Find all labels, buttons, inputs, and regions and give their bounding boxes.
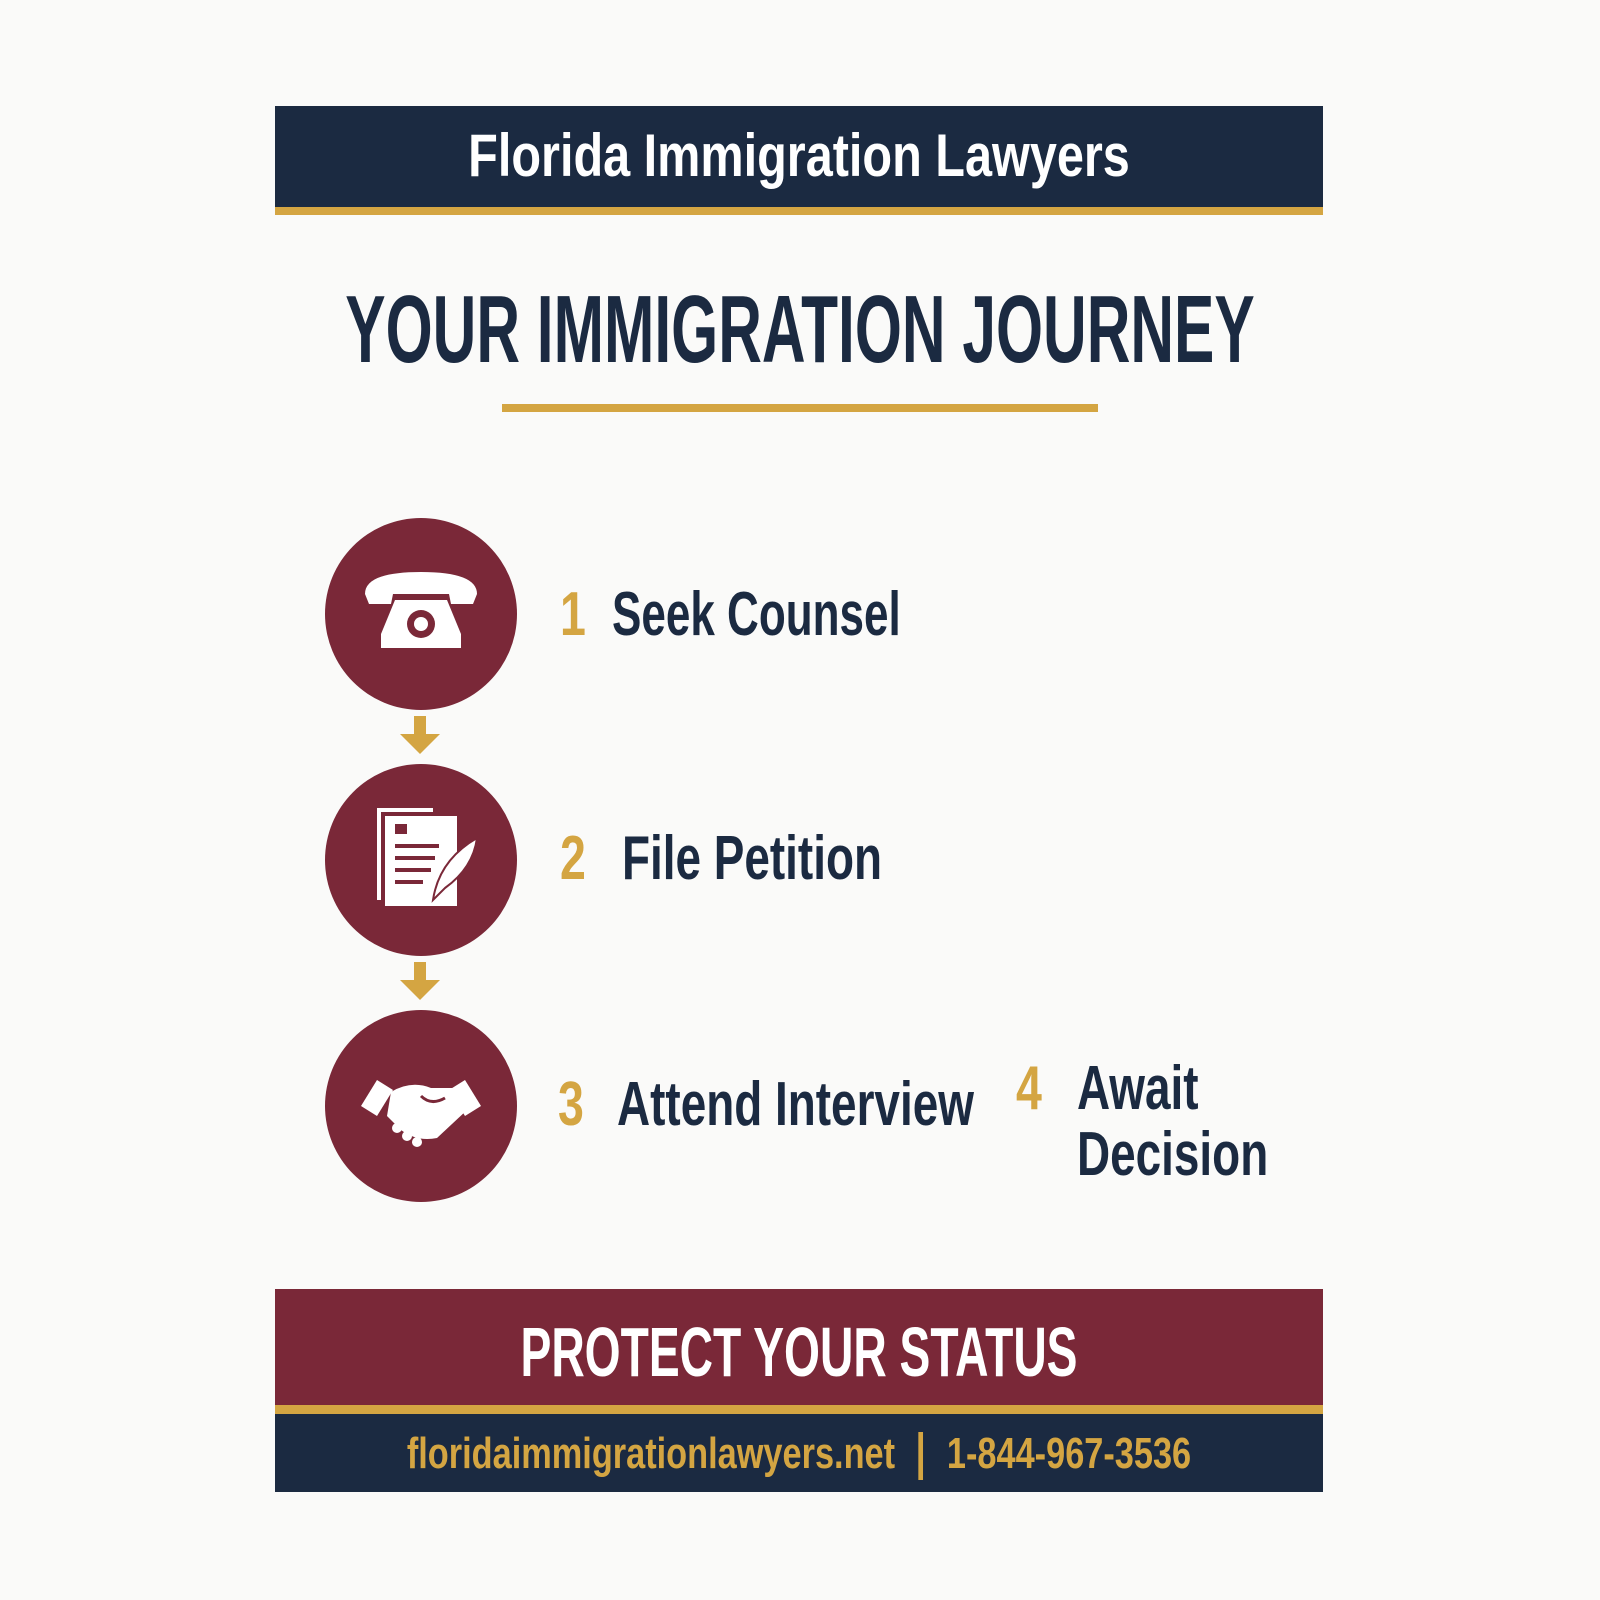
contact footer	[275, 1414, 1323, 1492]
step 3: 3	[558, 1070, 584, 1139]
step 1: Seek Counsel	[612, 580, 901, 649]
icon: handshake	[325, 1010, 517, 1202]
call-to-action banner	[275, 1289, 1323, 1414]
step 2: 2	[560, 824, 586, 893]
arrow 1	[400, 716, 440, 754]
step 4: Await	[1077, 1054, 1199, 1123]
contact text: floridaimmigrationlawyers.net 1-844-967-3536	[407, 1429, 1191, 1478]
icon: document with quill	[325, 764, 517, 956]
header text: Florida Immigration Lawyers	[468, 122, 1130, 189]
title underline	[502, 404, 1098, 412]
header banner	[275, 106, 1323, 215]
step 3: Attend Interview	[617, 1070, 974, 1139]
step 4: Decision	[1077, 1120, 1268, 1189]
title: YOUR IMMIGRATION JOURNEY	[345, 276, 1255, 383]
step 2: File Petition	[622, 824, 882, 893]
step 1: 1	[560, 580, 586, 649]
step 4: 4	[1016, 1054, 1042, 1123]
icon: telephone	[325, 518, 517, 710]
cta text: PROTECT YOUR STATUS	[521, 1313, 1077, 1391]
step 4	[1016, 1054, 1268, 1189]
arrow 2	[400, 962, 440, 1000]
